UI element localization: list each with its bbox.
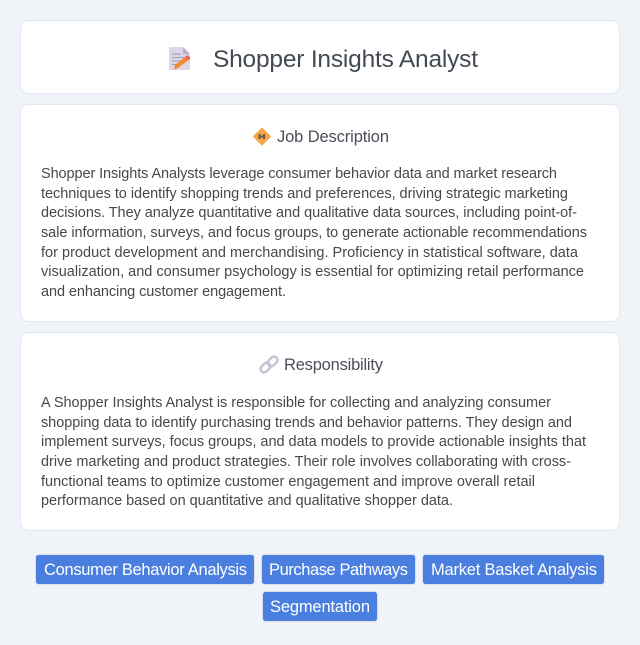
text: job description body: Shopper Insights Analysts leverage consumer behavior data and market research (41, 166, 557, 182)
tag: consumer behavior analysis: Consumer Behavior Analysis (44, 561, 247, 579)
panel: header (20, 20, 620, 94)
heading: responsibility: Responsibility (284, 356, 384, 374)
text: job description body (41, 166, 587, 300)
text: responsibility body: shopping data to identify purchasing trends and behavior patterns. They design and (41, 415, 572, 431)
icon: orange diamond (254, 128, 270, 145)
text: responsibility body (41, 395, 586, 509)
panel: job description (20, 104, 620, 322)
tag: market basket analysis: Market Basket Analysis (431, 561, 597, 579)
tags (36, 554, 604, 622)
heading: job description: Job Description (277, 128, 389, 146)
tag: purchase pathways: Purchase Pathways (269, 561, 408, 579)
text: responsibility body: performance based on quantitative and qualitative shopper data. (41, 493, 453, 509)
text: job description body: and enhancing customer engagement. (41, 284, 286, 300)
text: responsibility body: drive marketing and product strategies. Their role involves collaborating with cross- (41, 454, 571, 470)
title: Shopper Insights Analyst (213, 46, 478, 73)
text: responsibility body: A Shopper Insights Analyst is responsible for collecting and analyzing consumer (41, 395, 551, 411)
text: job description body: sale information, surveys, and focus groups, to generate actionable recommendations (41, 225, 587, 241)
icon: link (259, 355, 279, 374)
text: job description body: techniques to identify shopping trends and preferences, driving strategic marketing (41, 186, 568, 202)
tag: purchase pathways (262, 554, 416, 584)
text: job description body: for product development and merchandising. Proficiency in statistical software, data (41, 245, 579, 261)
tag: market basket analysis (422, 554, 604, 584)
panel: responsibility (20, 332, 620, 530)
text: job description body: decisions. They analyze quantitative and qualitative data sources, including point-of- (41, 205, 577, 221)
tag: segmentation (262, 592, 378, 622)
text: responsibility body: functional teams to optimize customer engagement and improve overall retail (41, 474, 535, 490)
text: responsibility body: implement surveys, focus groups, and data models to provide actionable insights that (41, 434, 586, 450)
icon: memo with pencil (169, 47, 190, 70)
text: job description body: visualization, and consumer psychology is essential for optimizing retail performance (41, 264, 584, 280)
tag: segmentation: Segmentation (270, 598, 370, 616)
tag: consumer behavior analysis (36, 554, 254, 584)
